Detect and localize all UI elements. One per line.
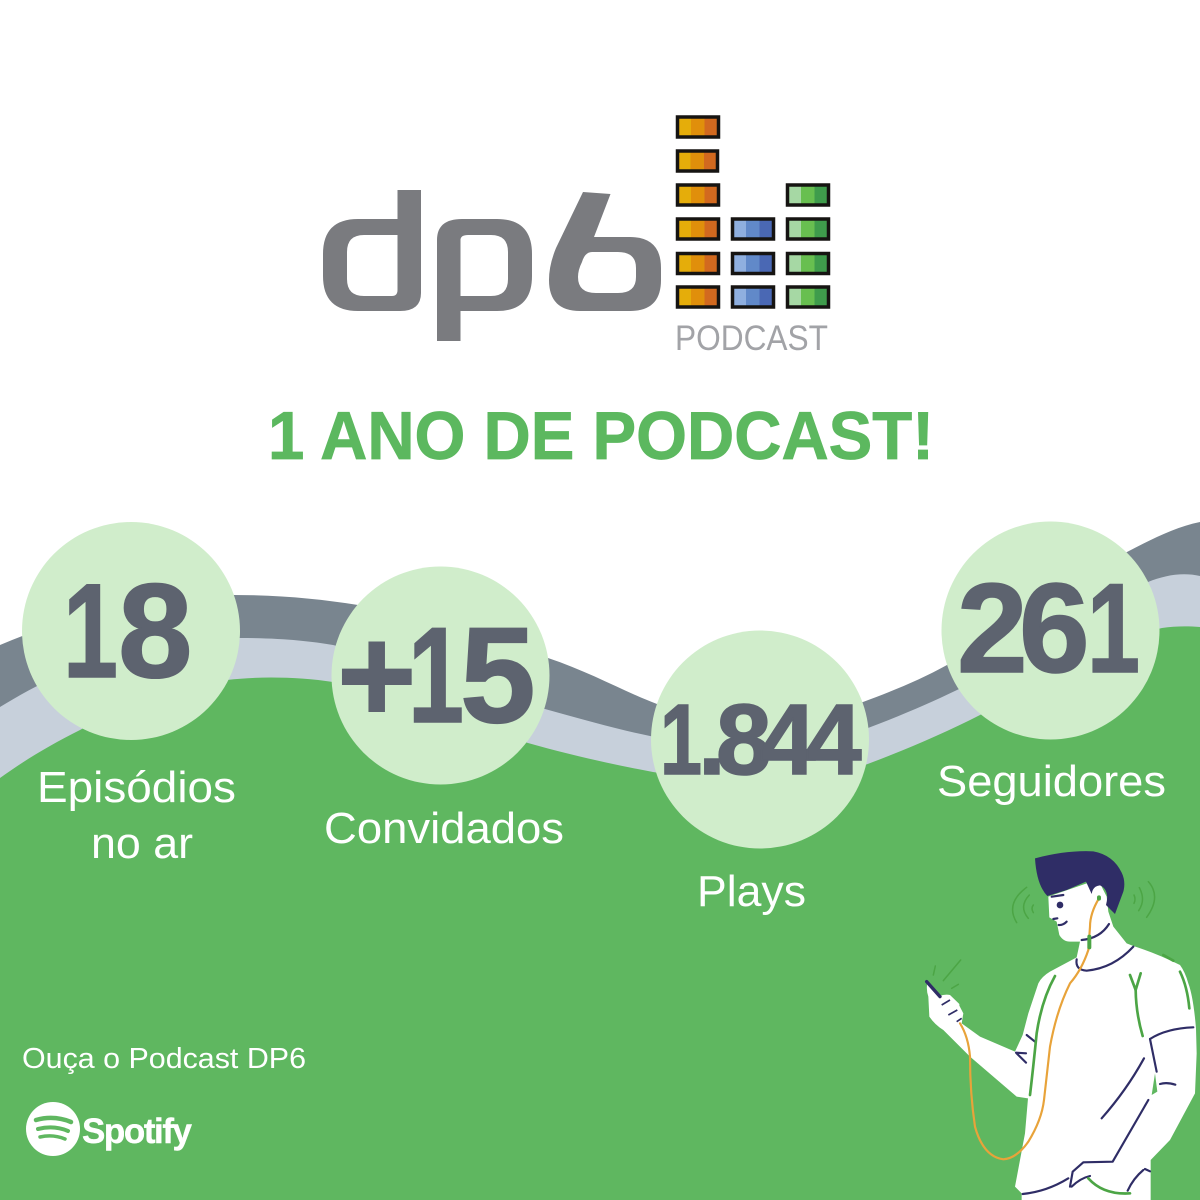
stat: plays: .: [698, 684, 726, 796]
background waves: [0, 522, 1200, 1200]
finger lines: [942, 1000, 962, 1022]
stat: plays: 4: [806, 684, 862, 796]
earphone details: [1089, 897, 1099, 947]
spotify logo: Spotify: [82, 1112, 193, 1151]
arm gap: [1152, 1073, 1157, 1095]
title: 1 ANO DE PODCAST!: [268, 398, 934, 474]
hair: [1035, 851, 1124, 914]
stat: plays: Plays: [697, 867, 806, 916]
stat: plays: 4: [760, 684, 816, 796]
illustration: man listening on earphones: [927, 851, 1197, 1200]
stat: followers: 6: [1019, 557, 1090, 699]
stat: followers: Seguidores: [937, 757, 1166, 806]
sound waves: [933, 882, 1155, 988]
spotify logo: [26, 1102, 193, 1156]
phone: [927, 982, 940, 997]
body and arm: [927, 883, 1197, 1200]
stat: followers: 2: [957, 557, 1028, 699]
face and clothing lines: [1016, 895, 1193, 1194]
stat: episodes: [22, 522, 240, 868]
stat: guests: Convidados: [324, 804, 564, 853]
stat: followers: 1: [1087, 557, 1140, 699]
earphone wire: [960, 898, 1099, 1159]
stat: episodes: 8: [118, 557, 193, 706]
stat: episodes: Episódios: [37, 763, 236, 812]
logo: dp6 podcast: [323, 117, 828, 358]
stat: guests: +: [337, 599, 416, 751]
stat: plays: [651, 630, 869, 916]
eye: [1057, 902, 1063, 908]
stat: plays: 1: [660, 684, 702, 796]
stat: episodes: 1: [63, 557, 118, 706]
stat: guests: 1: [408, 599, 464, 751]
call to action text: Ouça o Podcast DP6: [22, 1043, 306, 1075]
stat: plays: 8: [716, 684, 772, 796]
equalizer bars: [678, 117, 828, 307]
stat: followers: [937, 522, 1166, 806]
logo word PODCAST: PODCAST: [675, 319, 828, 358]
logo letters dp6: [323, 190, 661, 341]
stat: episodes: no ar: [91, 819, 193, 868]
stat: guests: 5: [460, 599, 536, 751]
stat: guests: [324, 566, 564, 853]
green shirt lines: [1030, 955, 1189, 1193]
